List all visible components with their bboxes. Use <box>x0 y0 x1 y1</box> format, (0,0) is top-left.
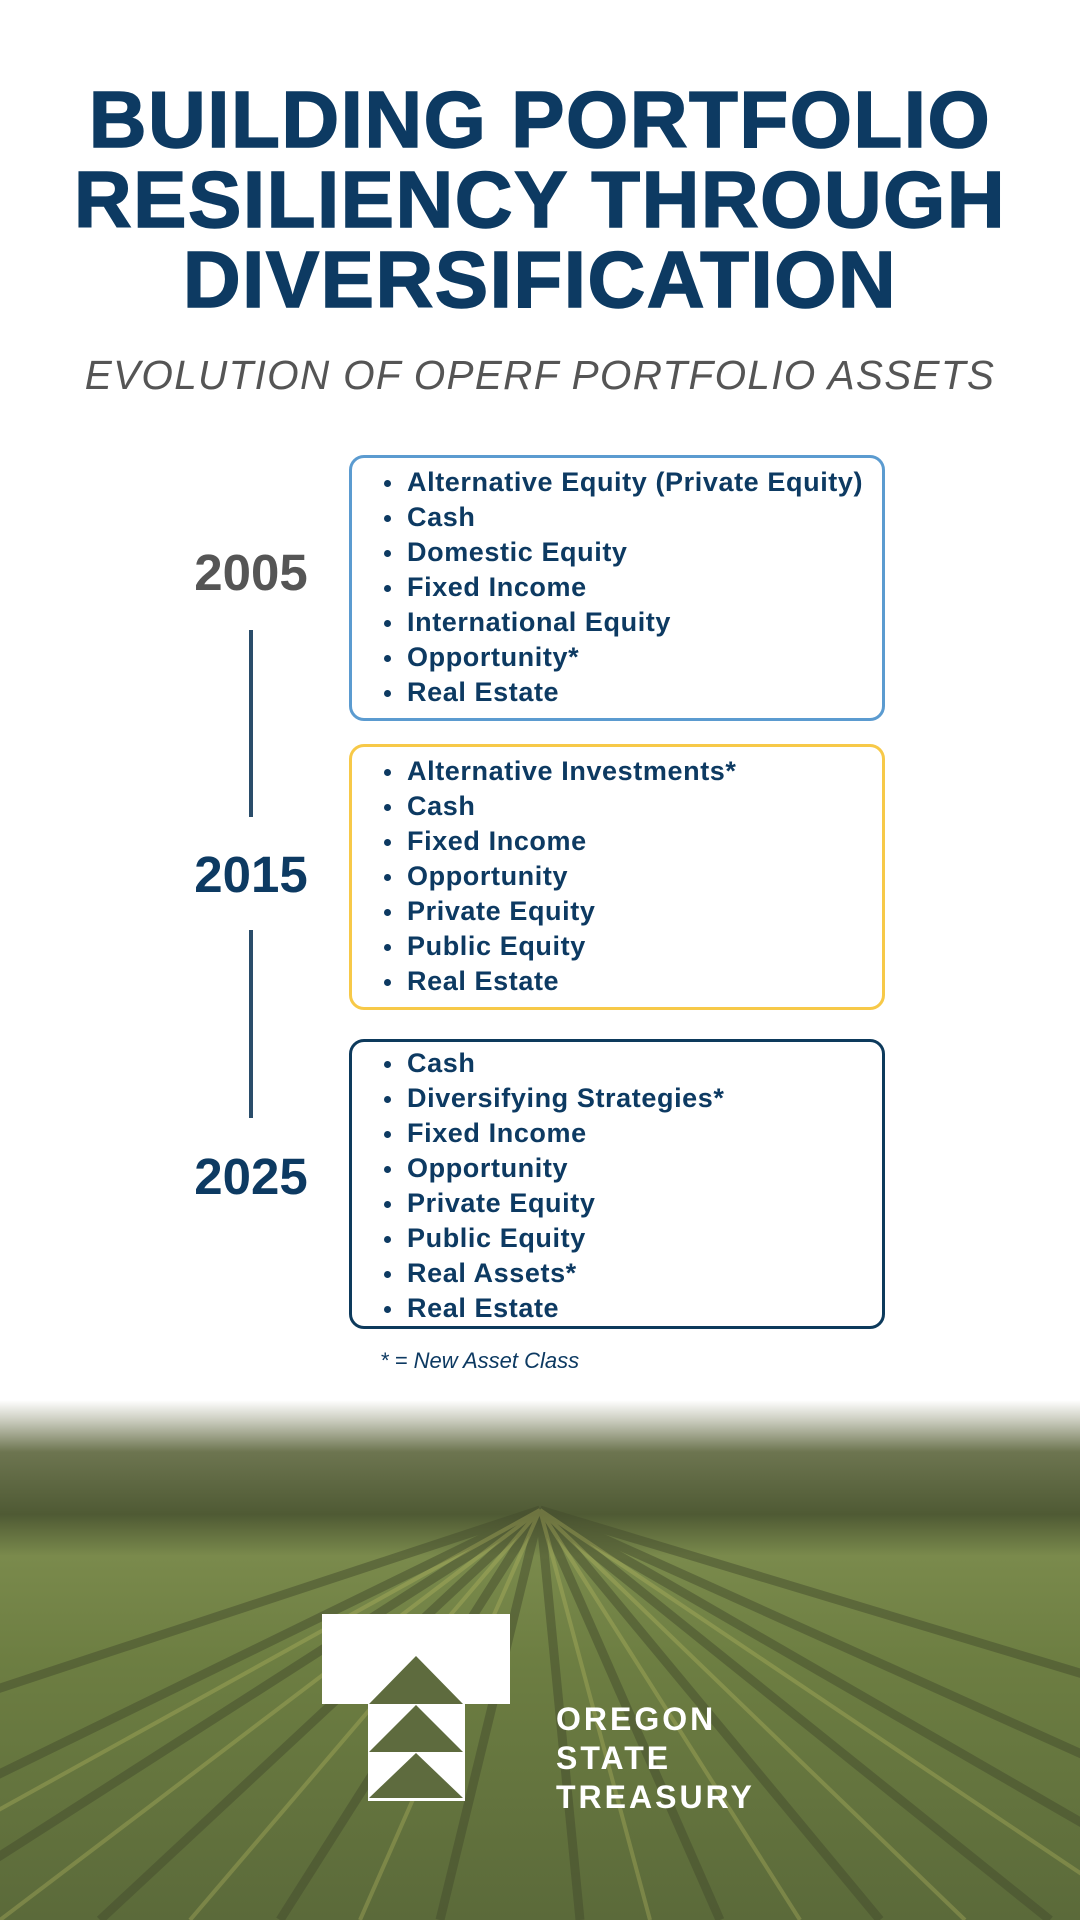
panel: 2005 assets: Real Estate <box>407 677 559 707</box>
panel: 2025 assets: Diversifying Strategies* <box>407 1083 725 1113</box>
title <box>74 75 1006 324</box>
panel: 2005 assets: International Equity <box>407 607 671 637</box>
logo: Oregon State Treasury <box>322 1614 755 1815</box>
panel: 2025 assets: Real Assets* <box>407 1258 577 1288</box>
panel: 2005 assets: Cash <box>407 502 475 532</box>
title: BUILDING PORTFOLIO <box>89 75 991 164</box>
photo: vineyard <box>0 1402 1080 1920</box>
panel: 2025 assets: Public Equity <box>407 1223 586 1253</box>
logo text: STATE <box>556 1740 671 1776</box>
panel: 2015 assets <box>349 744 885 1010</box>
title: DIVERSIFICATION <box>183 235 897 324</box>
title: RESILIENCY THROUGH <box>74 155 1006 244</box>
panel: 2005 assets: Alternative Equity (Private Equity) <box>407 467 863 497</box>
timeline line 1 <box>249 630 253 817</box>
panel: 2025 assets: Fixed Income <box>407 1118 587 1148</box>
logo text: OREGON <box>556 1701 716 1737</box>
panel: 2015 assets: Opportunity <box>407 861 568 891</box>
panel: 2025 assets <box>349 1039 885 1329</box>
logo text: TREASURY <box>556 1779 755 1815</box>
panel: 2015 assets: Real Estate <box>407 966 559 996</box>
timeline line 2 <box>249 930 253 1118</box>
panel: 2005 assets: Domestic Equity <box>407 537 628 567</box>
panel: 2025 assets: Cash <box>407 1048 475 1078</box>
panel: 2005 assets <box>349 455 885 721</box>
panel: 2025 assets: Private Equity <box>407 1188 595 1218</box>
subtitle: EVOLUTION OF OPERF PORTFOLIO ASSETS <box>85 352 995 398</box>
panel: 2025 assets: Opportunity <box>407 1153 568 1183</box>
panel: 2015 assets: Cash <box>407 791 475 821</box>
logo text <box>556 1701 755 1815</box>
panel: 2015 assets: Alternative Investments* <box>407 756 737 786</box>
panel: 2025 assets: Real Estate <box>407 1293 559 1323</box>
panel: 2015 assets: Public Equity <box>407 931 586 961</box>
year: 2025: 2025 <box>194 1148 308 1205</box>
year: 2005: 2005 <box>194 544 308 601</box>
panel: 2015 assets: Fixed Income <box>407 826 587 856</box>
year: 2015: 2015 <box>194 846 308 903</box>
panel: 2005 assets: Opportunity* <box>407 642 579 672</box>
footnote: * = New Asset Class <box>380 1348 579 1373</box>
panel: 2005 assets: Fixed Income <box>407 572 587 602</box>
panel: 2015 assets: Private Equity <box>407 896 595 926</box>
icon: treasury mark <box>322 1614 510 1801</box>
